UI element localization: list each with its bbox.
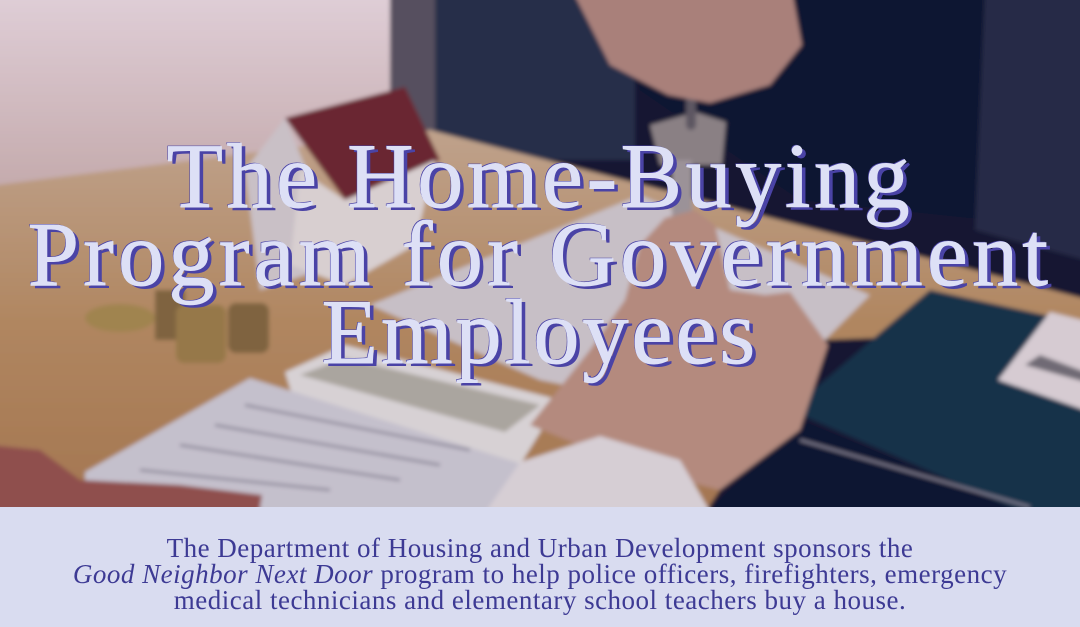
key — [650, 112, 726, 165]
caption text: The Department of Housing and Urban Development sponsors the — [167, 533, 913, 563]
title: The Home-Buying — [167, 125, 913, 227]
papers — [370, 194, 872, 387]
title — [28, 125, 1052, 386]
title: Employees — [322, 281, 758, 383]
caption text — [73, 533, 1007, 615]
dark tablet — [790, 290, 1080, 520]
calculator — [998, 312, 1080, 412]
model house — [245, 122, 308, 292]
title: Program for Government — [28, 203, 1052, 305]
caption text: medical technicians and elementary school teachers buy a house. — [174, 585, 906, 615]
caption text: Good Neighbor Next Door program to help police officers, firefighters, emergency — [73, 559, 1007, 589]
open hand — [530, 210, 828, 490]
top hand — [572, 0, 802, 103]
coins — [85, 304, 155, 332]
left hand — [0, 444, 264, 507]
